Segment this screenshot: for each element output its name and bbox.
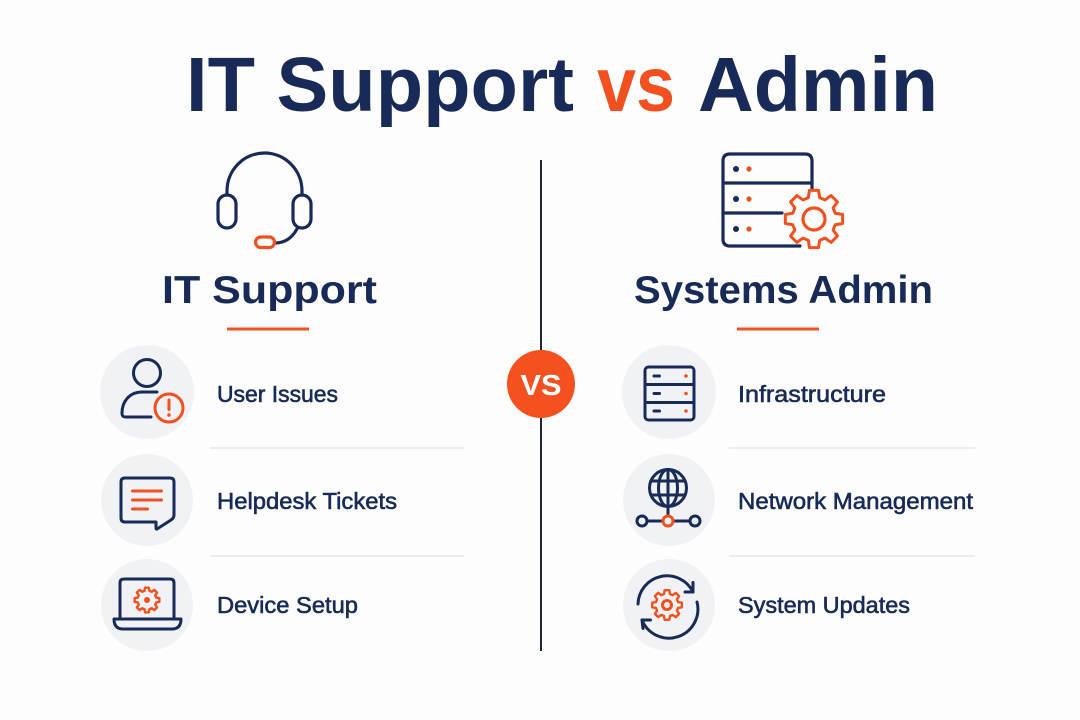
item: System Updates: System Updates bbox=[738, 592, 910, 618]
icon: headset bbox=[218, 153, 311, 248]
item: User Issues bbox=[100, 345, 338, 439]
item: Infrastructure bbox=[622, 345, 886, 439]
item: Network Management bbox=[623, 454, 974, 546]
title: IT Support bbox=[186, 42, 574, 128]
item: Network Management: Network Management bbox=[738, 488, 974, 514]
item: Helpdesk Tickets bbox=[101, 454, 397, 546]
icon: ticket speech bubble bbox=[121, 478, 174, 529]
heading underline bbox=[227, 328, 309, 330]
panel: IT Support bbox=[100, 153, 464, 651]
title: vs bbox=[597, 42, 675, 128]
icon: server rack with gear bbox=[723, 154, 843, 248]
vs badge bbox=[507, 350, 575, 418]
item: Helpdesk Tickets: Helpdesk Tickets bbox=[217, 488, 397, 514]
icon: globe network bbox=[637, 470, 700, 526]
heading: Systems Admin: Systems Admin bbox=[634, 269, 933, 312]
panel: Systems Admin bbox=[622, 154, 975, 651]
item: Infrastructure: Infrastructure bbox=[738, 381, 886, 407]
title: Admin bbox=[698, 42, 938, 128]
icon: user alert bbox=[122, 360, 183, 422]
center divider line bbox=[540, 160, 542, 651]
icon: server bbox=[645, 367, 694, 420]
icon: refresh gear bbox=[638, 576, 698, 638]
title bbox=[186, 42, 938, 128]
item: System Updates bbox=[623, 559, 910, 651]
heading underline bbox=[737, 328, 819, 330]
item: Device Setup bbox=[101, 559, 358, 651]
vs badge: VS bbox=[520, 370, 562, 402]
heading: IT Support: IT Support bbox=[162, 269, 377, 312]
item: Device Setup: Device Setup bbox=[217, 592, 358, 618]
item: User Issues: User Issues bbox=[217, 381, 338, 407]
icon: laptop with gear bbox=[114, 579, 181, 629]
